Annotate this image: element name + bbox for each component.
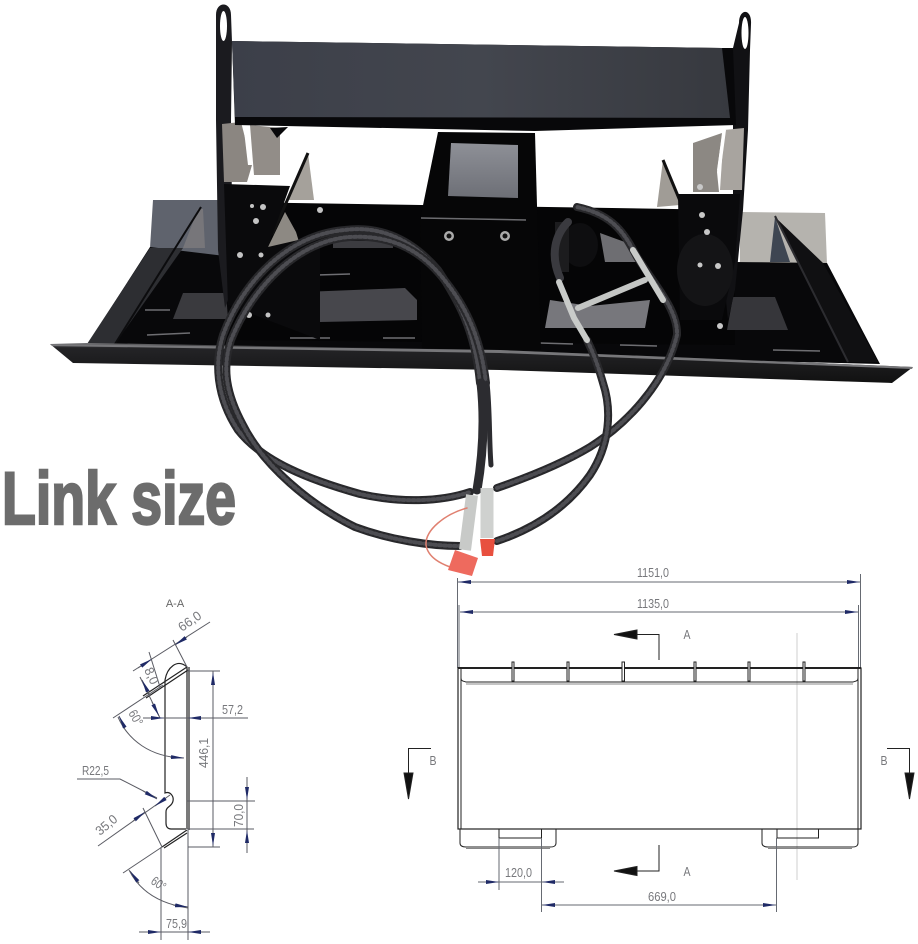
right triangle plate: [657, 160, 680, 207]
dim 1135.0: [459, 596, 858, 668]
photo: hydraulic attachment: [50, 4, 913, 383]
dim 57.2: [143, 702, 248, 718]
tray window centre left: [297, 288, 417, 322]
dim 8.0: 8,0: [141, 665, 162, 687]
tray right slope: [775, 217, 878, 362]
tabs: [512, 662, 805, 681]
feet: [460, 829, 858, 848]
hose centre drop: [477, 383, 483, 490]
drawing: top view: [404, 565, 914, 912]
hose right long: [497, 207, 677, 488]
tray right back wall: [740, 212, 827, 264]
dim 75.9: 75,9: [166, 916, 187, 931]
section arrow A bottom: A: [684, 864, 691, 879]
connector left: [465, 495, 472, 550]
back plate black: [230, 202, 735, 345]
hose outer left 2: [226, 237, 486, 546]
dim 70.0: [187, 777, 255, 853]
hose outer left: [218, 229, 480, 500]
dim 669.0: 669,0: [648, 889, 676, 904]
floor highlights: [145, 274, 820, 351]
dim R22.5: R22,5: [82, 763, 109, 778]
top beam: [232, 41, 736, 131]
right gusset silver: [693, 133, 722, 192]
dim 120.0: 120,0: [505, 865, 532, 880]
strap loop: [426, 508, 467, 567]
dim 669.0: [542, 838, 776, 912]
section arrow B right: [880, 748, 914, 799]
tray left slope: [87, 248, 183, 344]
tray floor: [87, 247, 880, 364]
red plug left: [448, 550, 478, 576]
section arrow B left: B: [430, 753, 436, 768]
box bolts: [444, 231, 454, 241]
left gusset silver: [222, 122, 252, 182]
left bolts: [237, 204, 323, 318]
profile outline: [143, 664, 189, 848]
dim 60 top: 60°: [125, 707, 146, 728]
hose right inner: [497, 340, 608, 541]
body outline: [458, 668, 861, 829]
dim 1151.0: [458, 565, 860, 668]
dim 120.0: [478, 838, 564, 912]
box edge: [421, 218, 526, 220]
section arrow A top: A: [684, 627, 691, 642]
dim 1135.0: 1135,0: [637, 596, 669, 611]
silver patch right: [600, 233, 640, 262]
section arrow A top: [614, 627, 691, 660]
section arrow A bottom: [614, 845, 691, 879]
drawing: section A-A: [77, 598, 255, 940]
tray window centre right: [545, 300, 650, 328]
tray window left: [173, 293, 228, 319]
motor: [562, 223, 598, 267]
silver fittings: [559, 282, 587, 340]
left side plate: [216, 4, 232, 308]
dim 1151.0: 1151,0: [637, 565, 669, 580]
left triangle plate: [288, 153, 314, 200]
dim R22.5: [77, 763, 157, 799]
dim 60 bottom: 60°: [148, 873, 169, 894]
dim 446.1: [187, 671, 220, 847]
dim 66.0: 66,0: [175, 608, 204, 634]
dim 446.1: 446,1: [196, 738, 211, 768]
tray left back wall: [150, 200, 222, 258]
dim 60 bottom: [123, 847, 188, 908]
dim 35.0: 35,0: [92, 811, 120, 838]
hose upper stub: [555, 222, 568, 278]
connector right: [480, 488, 494, 538]
right mount block: [678, 194, 740, 320]
centre box: [420, 132, 541, 350]
silver patch left: [268, 212, 300, 247]
dim 57.2: 57,2: [222, 702, 243, 717]
tray window right: [727, 297, 788, 330]
dim 70.0: 70,0: [231, 804, 246, 827]
dim 75.9: [139, 830, 210, 940]
dim 66.0: [133, 608, 210, 687]
section arrow B right: B: [880, 753, 888, 768]
front lip: [50, 343, 913, 383]
box screen: [448, 143, 518, 198]
hydraulic hoses: [218, 207, 677, 567]
label A-A: A-A: [166, 598, 185, 610]
right bolts: [697, 184, 723, 329]
dim 60 top: [113, 685, 184, 758]
dim 35.0: [92, 795, 170, 847]
left mount block: [224, 184, 320, 340]
section arrow B left: [404, 748, 436, 799]
red plug right: [480, 539, 495, 556]
right side plate: [722, 12, 751, 320]
dim 8.0: [140, 665, 162, 718]
centre line: [796, 633, 798, 880]
title: Link size: [2, 457, 236, 540]
